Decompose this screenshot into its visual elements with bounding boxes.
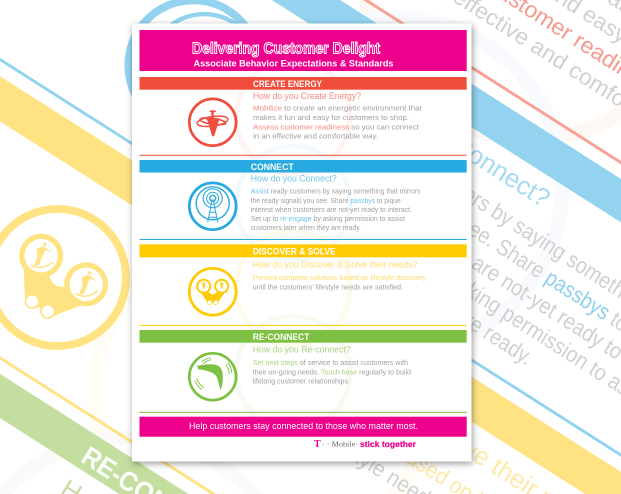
logo wordmark: · · Mobile· (322, 440, 358, 449)
icon: boomerang (189, 353, 236, 400)
poster content (140, 30, 467, 450)
panel: create energy (140, 77, 467, 156)
section bar (140, 330, 467, 343)
body text: the ready signals you see. Share passbys to pique (251, 196, 401, 205)
panel: poster sheet (132, 24, 472, 462)
section bar (140, 244, 467, 257)
body text: makes it fun and easy for customers to shop. (253, 113, 409, 122)
background: red rule (91, 0, 621, 342)
banner background (140, 417, 467, 437)
panel: title banner (140, 30, 467, 71)
body text: Set next steps of service to assist customers with (253, 358, 408, 367)
logo T mark: T (314, 439, 321, 450)
body text: until the customers' lifestyle needs are satisfied. (253, 282, 403, 291)
question: How do you Re-connect? (253, 345, 351, 355)
background icon: blue rings (104, 0, 285, 156)
panel: re-connect (140, 330, 467, 413)
banner background (140, 30, 467, 71)
body text (251, 187, 421, 232)
panel: discover and solve (140, 244, 467, 326)
body text (253, 104, 423, 141)
icon: binoculars (189, 268, 236, 315)
title: Delivering Customer Delight (192, 40, 381, 57)
section heading: RE-CONNECT (253, 332, 310, 342)
section heading: CREATE ENERGY (253, 79, 322, 89)
body text: in an effective and comfortable way. (253, 132, 378, 141)
subtitle: Associate Behavior Expectations & Standards (194, 59, 394, 69)
panel: connect (140, 160, 467, 240)
body text: customers later when they are ready. (251, 223, 361, 232)
section bar (140, 77, 467, 90)
body text: Assist ready customers by saying something that mirrors (251, 187, 421, 196)
body text: Mobilize to create an energetic environment that (253, 104, 423, 113)
body text: Assess customer readiness so you can connect (253, 122, 420, 131)
question: How do you Connect? (251, 174, 337, 184)
body text: interest when customers are not-yet ready to interact. (251, 205, 412, 214)
icon: spinning top (189, 99, 236, 146)
icon: radio tower (189, 183, 236, 230)
section bar (140, 160, 467, 172)
closing message: Help customers stay connected to those who matter most. (189, 421, 418, 431)
body text: Set up to re-engage by asking permission to assist (251, 214, 406, 223)
question: How do you Discover & Solve their needs? (253, 259, 417, 269)
logo: T-Mobile stick together (314, 439, 417, 450)
body text: lifelong customer relationships. (253, 376, 350, 386)
body text: their on-going needs. Touch base regularly to build (253, 367, 411, 376)
faint watermark rings (236, 60, 350, 430)
background: blue band (64, 0, 621, 383)
body text (253, 358, 411, 386)
sheet background (132, 24, 472, 462)
body text (253, 273, 426, 291)
background: connect text: How do you Connect? (327, 54, 555, 213)
section heading: DISCOVER & SOLVE (253, 247, 336, 257)
question: How do you Create Energy? (253, 91, 361, 101)
background: yellow rule (0, 244, 621, 494)
section heading: CONNECT (251, 162, 294, 172)
background: connect text (252, 54, 621, 464)
background: create energy text (401, 0, 621, 240)
background: green band (0, 257, 621, 494)
logo tagline: stick together (360, 439, 417, 449)
body text: Present complete solutions based on lifestyle discovery (253, 273, 426, 282)
background icon: binoculars (0, 183, 152, 372)
panel: closing banner (140, 417, 467, 437)
background: connect text: customers later when they are ready. (252, 175, 538, 370)
